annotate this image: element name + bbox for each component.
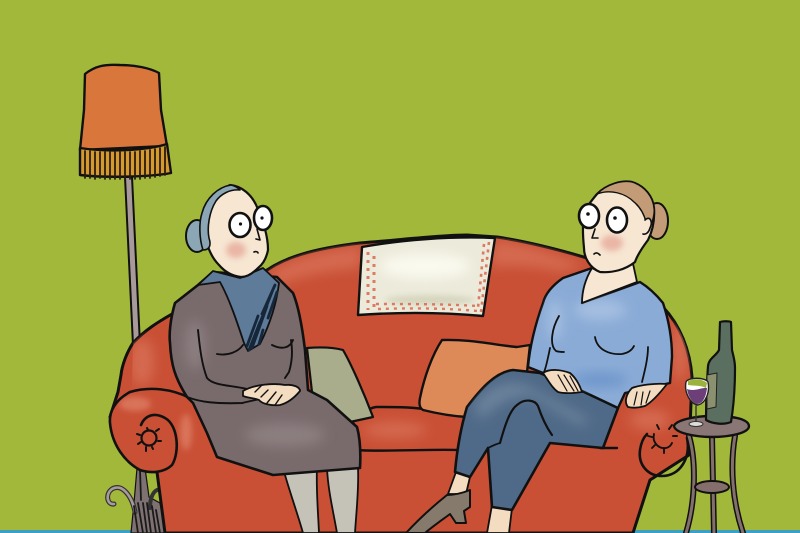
wine bottle: [706, 321, 735, 424]
glasses and eyes: [579, 204, 627, 232]
hair bun: [186, 220, 208, 252]
cheek: [226, 242, 246, 258]
nose and mouth: [592, 229, 600, 255]
scarf: [198, 268, 279, 351]
right sofa arm: [640, 425, 688, 476]
cheek: [601, 235, 623, 251]
dress: [170, 272, 360, 475]
sofa body: [110, 235, 692, 533]
table legs: [686, 436, 743, 533]
table shelf: [695, 481, 729, 493]
ear: [643, 218, 651, 234]
floor lamp: [80, 65, 171, 533]
younger woman on the right: [406, 182, 672, 533]
green cushion: [307, 347, 373, 422]
head: [204, 185, 268, 277]
lamp base: [108, 468, 166, 533]
lamp shade: [80, 65, 167, 150]
hair: [597, 182, 654, 228]
red sofa: [110, 235, 692, 533]
sofa highlights: [130, 240, 688, 438]
lamp fringe: [80, 144, 171, 179]
jeans: [455, 370, 618, 510]
ankle of crossed leg: [448, 472, 470, 494]
legs: [283, 466, 358, 533]
hair: [200, 185, 240, 250]
orange cushion: [419, 340, 530, 417]
nose and mouth: [254, 229, 260, 253]
neck: [582, 259, 637, 303]
foot of lower leg: [487, 505, 512, 533]
hands: [243, 384, 300, 405]
glasses and eyes: [230, 206, 272, 237]
wine glass: [686, 378, 709, 426]
hands: [543, 370, 667, 408]
table top: [674, 416, 749, 437]
lace blanket: [358, 237, 495, 316]
older woman on the left: [170, 185, 360, 533]
lamp pole: [125, 177, 140, 345]
shoe: [406, 490, 470, 533]
sweater: [528, 268, 672, 408]
hair bun: [646, 203, 668, 239]
left sofa arm: [110, 389, 192, 472]
blue floor strip: [0, 530, 800, 533]
side table with wine: [674, 321, 749, 533]
head: [583, 182, 654, 272]
seat cushion: [353, 407, 617, 451]
